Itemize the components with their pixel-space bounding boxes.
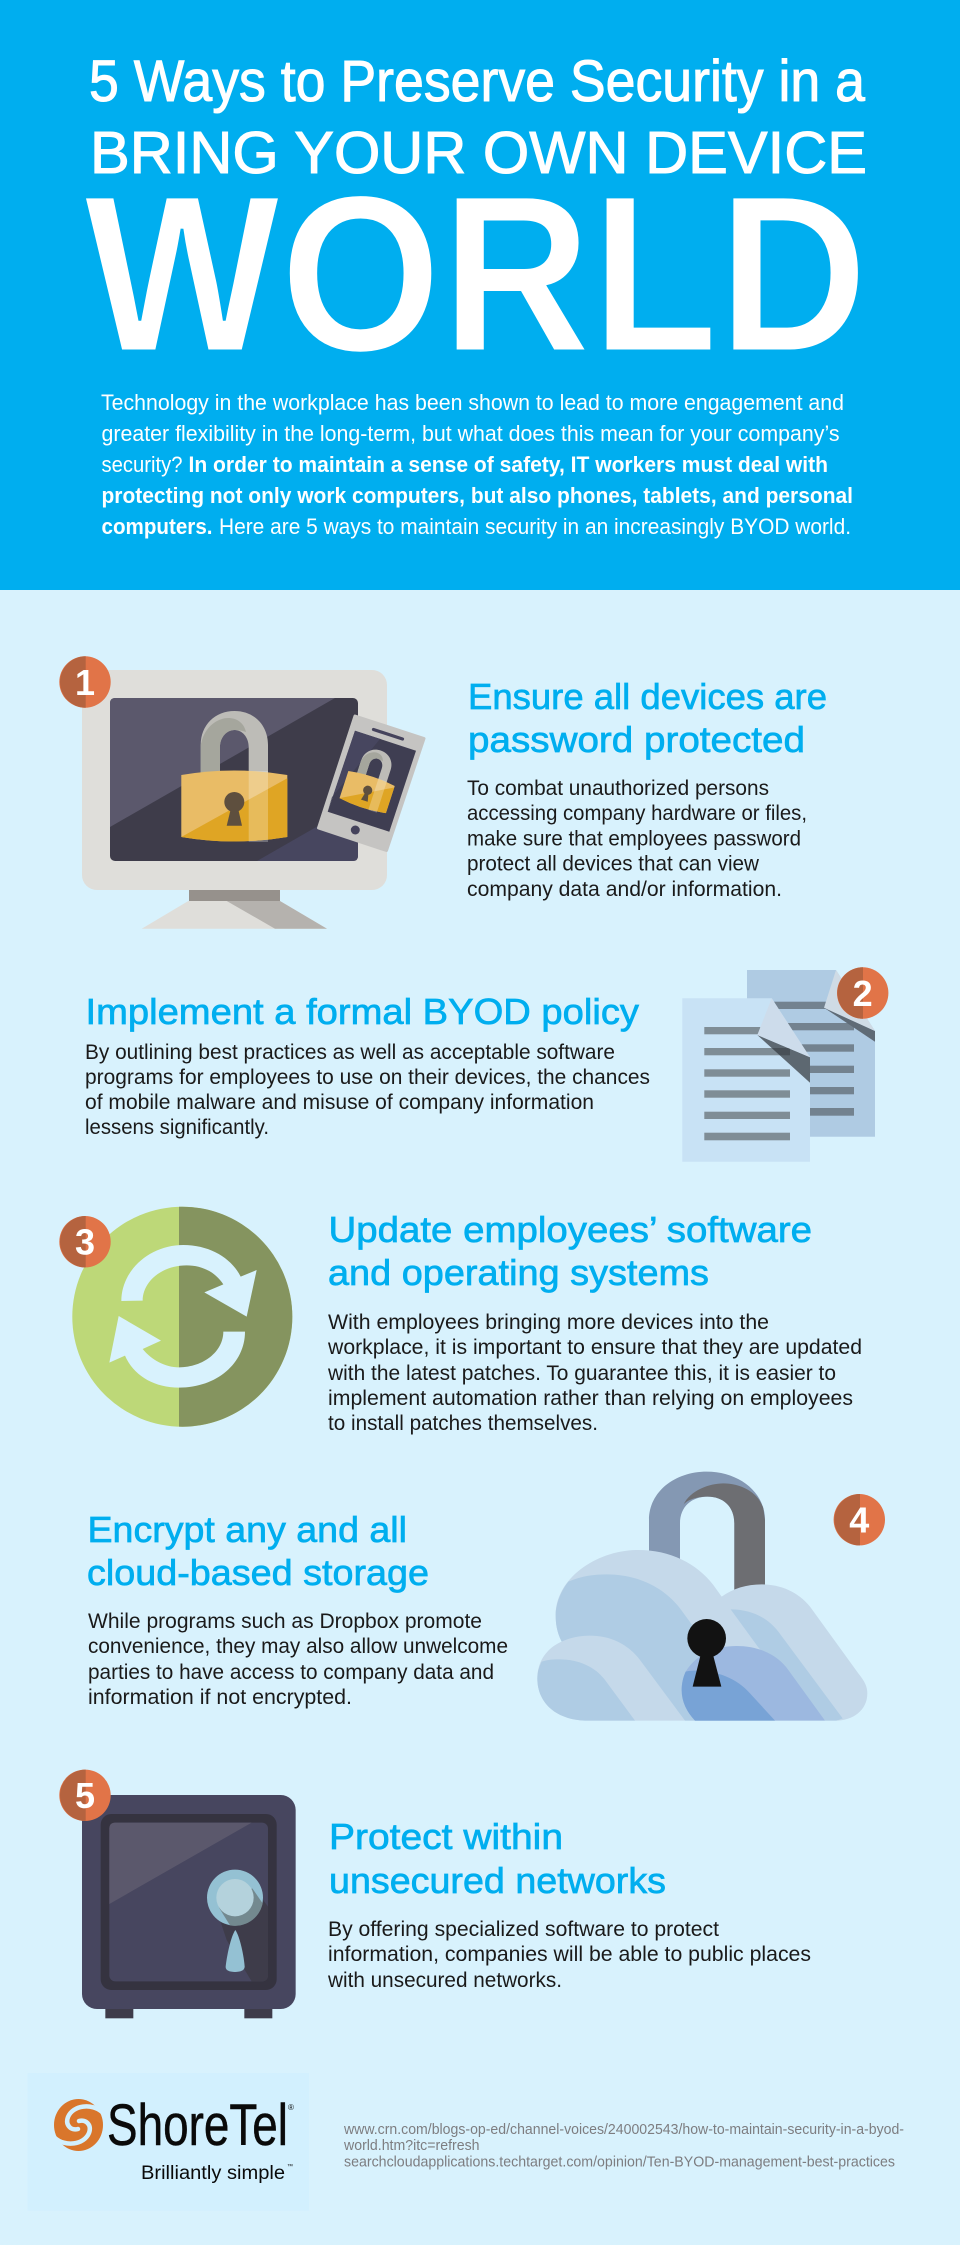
section 4 illustration: cloud padlock: [537, 1472, 867, 1721]
section 2 text: [85, 991, 650, 1139]
body 3: With employees bringing more devices into the: [328, 1311, 769, 1334]
intro text: Technology in the workplace has been shown to lead to more engagement and: [101, 390, 844, 415]
body 3: with the latest patches. To guarantee this, it is easier to: [327, 1362, 836, 1385]
body 5: [327, 1918, 811, 1992]
body 1: make sure that employees password: [467, 828, 801, 850]
padlock on phone: [339, 743, 404, 815]
heading 5: [329, 1816, 666, 1901]
title: BRING YOUR OWN DEVICE: [90, 120, 867, 186]
badge 1: [59, 656, 111, 708]
references: world.htm?itc=refresh: [343, 2138, 480, 2154]
body 4: While programs such as Dropbox promote: [88, 1610, 482, 1633]
section 5 illustration: safe: [82, 1795, 296, 2018]
logo panel: ShoreTel: ™: [287, 2163, 293, 2170]
body 1: To combat unauthorized persons: [467, 777, 769, 800]
heading 4: cloud-based storage: [87, 1552, 429, 1593]
heading 3: Update employees’ software: [328, 1209, 812, 1250]
body 1: [467, 777, 807, 901]
phone: [318, 716, 424, 850]
body 1: accessing company hardware or files,: [467, 802, 807, 825]
body 3: [327, 1311, 862, 1435]
header panel: [0, 0, 960, 590]
logo panel: ShoreTel: [28, 2073, 309, 2211]
references: www.crn.com/blogs-op-ed/channel-voices/240002543/how-to-maintain-security-in-a-byod-: [343, 2122, 904, 2138]
heading 2: Implement a formal BYOD policy: [86, 991, 639, 1032]
title: WORLD: [84, 149, 868, 399]
wordmark: ShoreTel: [107, 2093, 288, 2158]
badge 4: 4: [849, 1500, 869, 1540]
intro text: In order to maintain a sense of safety, IT workers must deal with: [188, 452, 828, 477]
badge 2: 2: [853, 973, 873, 1014]
icon: swirl mark: [54, 2099, 103, 2151]
intro text: computers.: [102, 514, 212, 539]
section 1 text: [467, 676, 827, 901]
heading 3: and operating systems: [328, 1252, 709, 1293]
refresh arrows: [109, 1245, 257, 1388]
body 2: By outlining best practices as well as acceptable software: [85, 1041, 615, 1064]
body 5: information, companies will be able to public places: [328, 1943, 811, 1966]
body 2: [85, 1041, 650, 1139]
body 2: programs for employees to use on their devices, the chances: [85, 1066, 650, 1089]
section 5 text: [327, 1816, 811, 1992]
heading 1: [468, 676, 827, 760]
heading 5: Protect within: [329, 1816, 563, 1857]
body 4: parties to have access to company data and: [88, 1661, 494, 1684]
intro text: security?: [102, 452, 182, 477]
body 4: information if not encrypted.: [88, 1686, 352, 1709]
badge 4: [834, 1494, 885, 1545]
body 5: By offering specialized software to protect: [328, 1918, 719, 1941]
title: [84, 49, 868, 399]
body 1: protect all devices that can view: [467, 852, 760, 876]
section 1 illustration: monitor and phone with padlocks: [82, 670, 424, 929]
badge 5: 5: [75, 1775, 95, 1816]
section 3 text: [327, 1209, 862, 1435]
references: [343, 2122, 904, 2170]
section 3 illustration: refresh circle: [72, 1207, 292, 1427]
intro text: greater flexibility in the long-term, but what does this mean for your company’s: [102, 421, 840, 446]
title: 5 Ways to Preserve Security in a: [89, 49, 866, 114]
badge 5: [59, 1770, 111, 1821]
body 2: lessens significantly.: [85, 1116, 269, 1139]
heading 5: unsecured networks: [329, 1860, 666, 1901]
body 4: [88, 1610, 508, 1709]
body 3: implement automation rather than relying on employees: [328, 1387, 853, 1410]
badge 3: 3: [75, 1222, 95, 1262]
intro text: [101, 390, 853, 539]
body 3: to install patches themselves.: [328, 1412, 598, 1435]
section 4 text: [87, 1509, 508, 1709]
logo panel: ShoreTel: ®: [288, 2103, 294, 2112]
padlock on monitor: [181, 711, 287, 842]
heading 1: password protected: [468, 719, 805, 760]
tagline: Brilliantly simple: [141, 2163, 285, 2184]
badge 1: 1: [75, 662, 95, 703]
heading 4: [87, 1509, 429, 1593]
badge 2: [837, 967, 888, 1019]
body 1: company data and/or information.: [467, 878, 782, 901]
section 2 illustration: documents: [682, 970, 875, 1162]
body 5: with unsecured networks.: [327, 1969, 562, 1992]
badge 3: [59, 1216, 111, 1267]
body 4: convenience, they may also allow unwelcome: [88, 1635, 508, 1658]
body 2: of mobile malware and misuse of company information: [85, 1091, 594, 1114]
intro text: protecting not only work computers, but also phones, tablets, and personal: [102, 483, 853, 508]
heading 3: [328, 1209, 812, 1293]
references: searchcloudapplications.techtarget.com/opinion/Ten-BYOD-management-best-practices: [344, 2154, 895, 2170]
heading 4: Encrypt any and all: [88, 1509, 407, 1550]
body 3: workplace, it is important to ensure that they are updated: [327, 1336, 862, 1359]
heading 1: Ensure all devices are: [468, 676, 827, 717]
intro text: Here are 5 ways to maintain security in an increasingly BYOD world.: [219, 514, 851, 539]
